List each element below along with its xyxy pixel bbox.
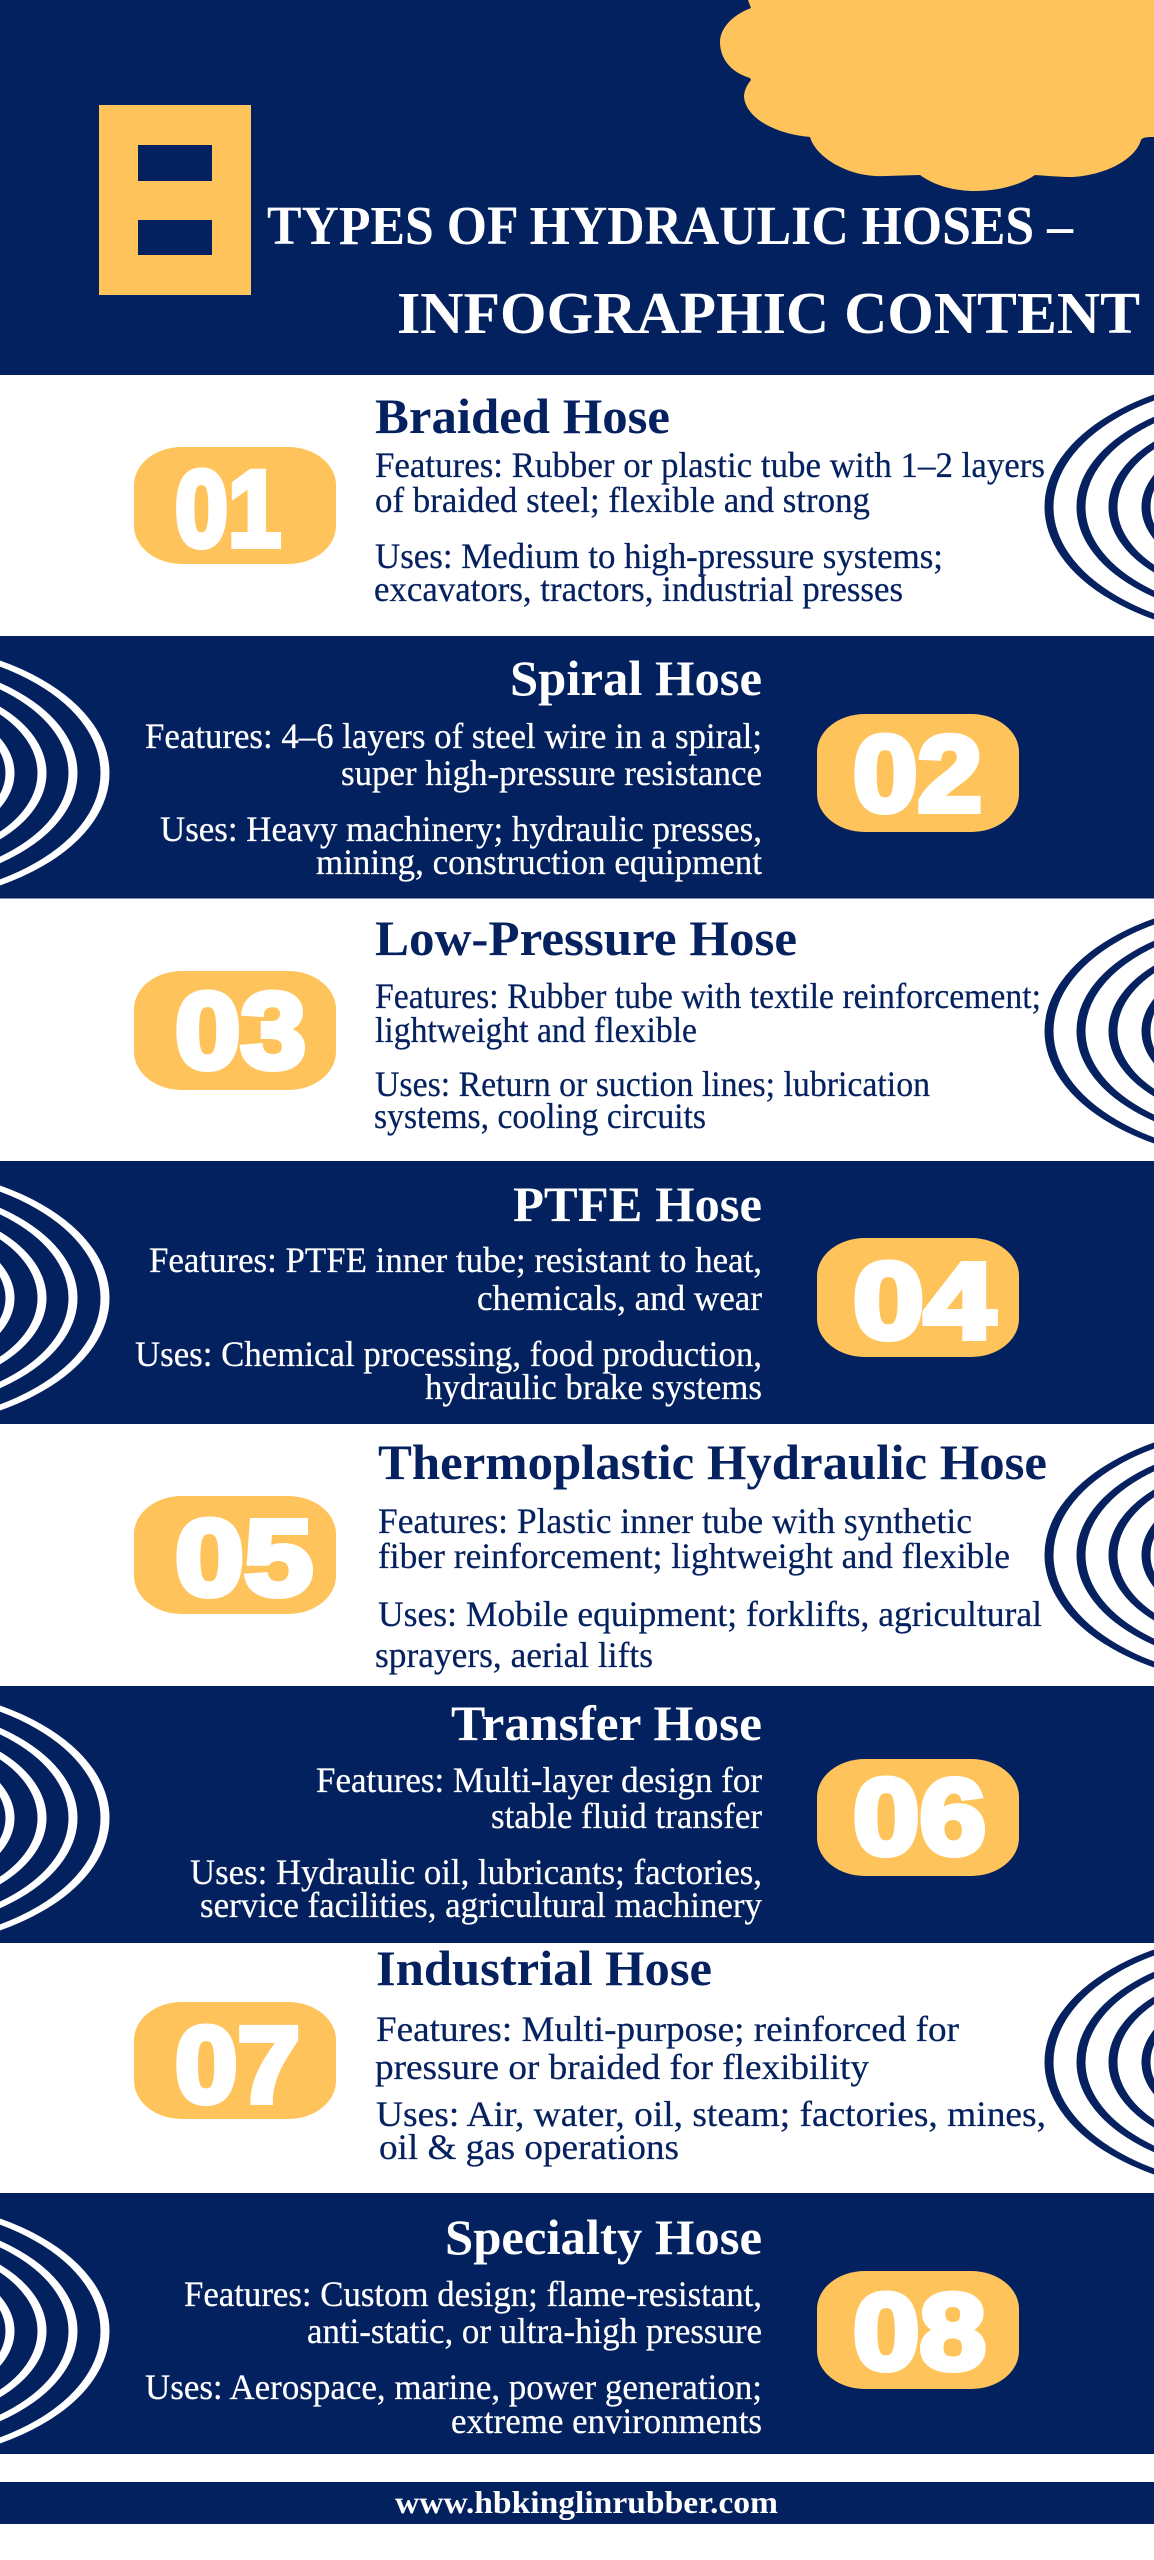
panel: 06 transfer hose: [0, 1686, 1154, 1947]
heading: ptfe hose: PTFE Hose: [513, 1176, 762, 1232]
badge 08: 08: [853, 2271, 986, 2392]
title: TYPES OF HYDRAULIC HOSES –: [267, 195, 1073, 256]
features text: [316, 1760, 762, 1836]
features text: [375, 2009, 959, 2087]
panel: 07 industrial hose: [134, 1933, 1154, 2191]
uses text: oil & gas operations: [379, 2127, 679, 2167]
heading: transfer hose: Transfer Hose: [451, 1695, 762, 1751]
badge 05: 05: [175, 1497, 313, 1618]
panel: 01 braided hose: [134, 378, 1154, 636]
heading: braided hose: Braided Hose: [375, 388, 670, 444]
icon: concentric rings left: [0, 2202, 105, 2460]
uses text: excavators, tractors, industrial presses: [374, 569, 903, 609]
uses text: sprayers, aerial lifts: [375, 1635, 653, 1675]
uses text: [374, 1064, 930, 1136]
uses text: extreme environments: [451, 2401, 762, 2441]
uses text: [374, 536, 943, 609]
badge 07: 07: [175, 2004, 300, 2125]
icon: concentric rings right: [1049, 1426, 1154, 1684]
header banner: [0, 0, 1154, 375]
panel: 05 thermoplastic hydraulic hose: [134, 1426, 1154, 1684]
uses text: [375, 1594, 1042, 1675]
uses text: Uses: Return or suction lines; lubrication: [375, 1064, 930, 1104]
heading: industrial hose: Industrial Hose: [376, 1940, 712, 1996]
icon: concentric rings left: [0, 1689, 105, 1947]
uses text: mining, construction equipment: [316, 842, 762, 882]
uses text: Uses: Heavy machinery; hydraulic presses,: [160, 809, 762, 849]
badge 05: [134, 1496, 336, 1618]
uses text: [160, 809, 762, 882]
badge 06: [817, 1756, 1019, 1877]
heading: thermoplastic hydraulic hose: Thermoplastic Hydraulic Hose: [378, 1434, 1047, 1490]
badge 08: [817, 2271, 1019, 2392]
icon: concentric rings left: [0, 1169, 105, 1427]
badge 07: [134, 2002, 336, 2125]
uses text: Uses: Chemical processing, food production,: [135, 1334, 762, 1374]
badge 04: 04: [853, 1240, 995, 1361]
footer bar: [0, 2482, 1154, 2524]
badge 03: [134, 970, 336, 1091]
heading: specialty hose: Specialty Hose: [445, 2209, 762, 2265]
features text: stable fluid transfer: [491, 1796, 762, 1836]
icon: concentric rings right: [1049, 1933, 1154, 2191]
features text: Features: Rubber tube with textile reinforcement;: [375, 976, 1041, 1016]
features text: pressure or braided for flexibility: [375, 2047, 869, 2087]
features text: Features: 4–6 layers of steel wire in a spiral;: [145, 716, 762, 756]
features text: [378, 1501, 1010, 1576]
panel: 08 specialty hose: [0, 2193, 1154, 2460]
features text: anti-static, or ultra-high pressure: [307, 2311, 762, 2351]
features text: Features: Rubber or plastic tube with 1–2 layers: [375, 445, 1045, 485]
features text: [375, 445, 1045, 520]
badge 03: 03: [175, 970, 306, 1091]
icon: yellow scalloped cloud: [720, 0, 1154, 191]
features text: [149, 1240, 762, 1318]
numeral eight block: [99, 105, 251, 295]
features text: Features: Multi-purpose; reinforced for: [376, 2009, 959, 2049]
features text: chemicals, and wear: [477, 1278, 762, 1318]
uses text: service facilities, agricultural machinery: [200, 1885, 762, 1925]
features text: Features: PTFE inner tube; resistant to heat,: [149, 1240, 762, 1280]
features text: lightweight and flexible: [375, 1010, 697, 1050]
uses text: [135, 1334, 762, 1407]
badge 04: [817, 1238, 1019, 1361]
features text: fiber reinforcement; lightweight and flexible: [378, 1536, 1010, 1576]
website url: www.hbkinglinrubber.com: [395, 2484, 778, 2520]
panel: 02 spiral hose: [0, 636, 1154, 902]
uses text: Uses: Mobile equipment; forklifts, agricultural: [378, 1594, 1042, 1634]
heading: spiral hose: Spiral Hose: [510, 650, 762, 706]
uses text: Uses: Hydraulic oil, lubricants; factories,: [190, 1852, 762, 1892]
uses text: [190, 1852, 762, 1925]
uses text: systems, cooling circuits: [374, 1096, 706, 1136]
badge 06: 06: [853, 1756, 986, 1877]
features text: [145, 716, 762, 793]
icon: concentric rings right: [1049, 378, 1154, 636]
badge 01: [134, 447, 336, 569]
panel: 03 low-pressure hose: [134, 902, 1154, 1160]
uses text: [376, 2094, 1046, 2167]
icon: concentric rings right: [1049, 902, 1154, 1160]
uses text: hydraulic brake systems: [425, 1367, 762, 1407]
uses text: Uses: Air, water, oil, steam; factories, mines,: [376, 2094, 1046, 2134]
features text: [184, 2274, 762, 2351]
features text: [375, 976, 1041, 1050]
badge 01: 01: [175, 448, 281, 569]
uses text: [145, 2367, 762, 2441]
features text: of braided steel; flexible and strong: [375, 480, 870, 520]
heading: low-pressure hose: Low-Pressure Hose: [375, 910, 797, 966]
title: INFOGRAPHIC CONTENT: [397, 280, 1140, 346]
panel: 04 ptfe hose: [0, 1161, 1154, 1427]
features text: Features: Plastic inner tube with synthetic: [378, 1501, 972, 1541]
features text: Features: Multi-layer design for: [316, 1760, 762, 1800]
title: [267, 195, 1140, 346]
uses text: Uses: Aerospace, marine, power generation;: [145, 2367, 762, 2407]
badge 02: 02: [853, 713, 982, 834]
icon: concentric rings left: [0, 644, 105, 902]
uses text: Uses: Medium to high-pressure systems;: [375, 536, 943, 576]
badge 02: [817, 713, 1019, 834]
features text: Features: Custom design; flame-resistant,: [184, 2274, 762, 2314]
features text: super high-pressure resistance: [341, 753, 762, 793]
